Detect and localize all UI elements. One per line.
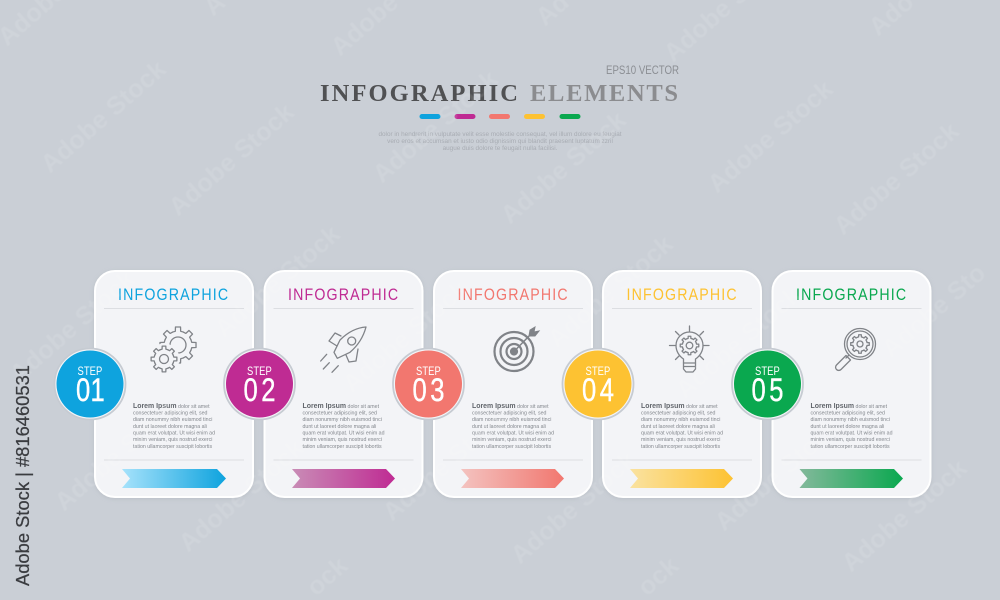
arrow: step 2 xyxy=(292,469,395,488)
step badge 3: STEP xyxy=(416,365,441,378)
panel: step 3 xyxy=(434,271,592,497)
text block: step 2: diam nonummy nibh euismod tinci xyxy=(302,417,382,423)
icon: gears xyxy=(148,327,196,374)
text block: step 3: tation ullamcorper suscipit lobortis xyxy=(472,444,551,450)
title xyxy=(320,80,678,107)
text block: step 1: quam erat volutpat. Ut wisi enim ad xyxy=(133,430,215,436)
text block: step 2: quam erat volutpat. Ut wisi enim ad xyxy=(302,430,385,436)
text block: step 3: diam nonummy nibh euismod tinci xyxy=(472,417,551,423)
subtitle text: augue duis dolore te feugait nulla facilisi. xyxy=(443,145,558,152)
step badge 2 xyxy=(224,348,295,420)
icon: target xyxy=(494,327,539,371)
text block: step 3: consectetuer adipiscing elit, sed xyxy=(472,410,546,416)
title: ELEMENTS xyxy=(530,80,678,107)
background watermarks: Adobe Stock xyxy=(710,413,846,537)
text block: step 3 xyxy=(472,403,554,450)
step badge 4: 04 xyxy=(582,373,614,409)
text block: step 2: dunt ut laoreet dolore magna ali xyxy=(302,424,376,430)
background watermarks: Adobe Stock xyxy=(506,446,642,570)
background watermarks: Adobe Stock xyxy=(543,230,679,354)
step badge 1: 01 xyxy=(76,373,105,409)
heading: step 3: INFOGRAPHIC xyxy=(458,286,568,304)
step badge 1: STEP xyxy=(78,365,102,378)
arrow: step 4 xyxy=(630,469,733,488)
background watermarks: Adobe Stock xyxy=(50,393,186,517)
step badge 3 xyxy=(393,348,464,420)
color dashes xyxy=(420,114,580,119)
text block: step 1 xyxy=(133,403,215,450)
text block: step 5: minim veniam, quis nostrud exerci xyxy=(810,437,890,443)
text block: step 4: Lorem Ipsum dolor sit amet xyxy=(641,403,718,410)
text block: step 5: tation ullamcorper suscipit lobortis xyxy=(810,444,890,450)
background watermarks: Adobe Stock xyxy=(210,220,346,344)
text block: step 4 xyxy=(641,403,723,450)
background watermarks: Adobe Stock xyxy=(368,65,504,189)
text block: step 4: dunt ut laoreet dolore magna ali xyxy=(641,424,715,430)
step badge 2: STEP xyxy=(247,365,272,378)
text block: step 4: tation ullamcorper suscipit lobortis xyxy=(641,444,720,450)
background watermarks: Adobe Stock xyxy=(378,403,514,527)
text block: step 4: consectetuer adipiscing elit, sed xyxy=(641,410,715,416)
background watermarks: Adobe Stock xyxy=(36,55,172,179)
panel: step 5 xyxy=(772,271,930,497)
text block: step 1: Lorem Ipsum dolor sit amet xyxy=(133,403,210,410)
background watermarks: Adobe Stock xyxy=(671,281,807,405)
text block: step 3: minim veniam, quis nostrud exerci xyxy=(472,437,551,443)
text block: step 4: minim veniam, quis nostrud exerci xyxy=(641,437,720,443)
background watermarks: Adobe Sto xyxy=(877,259,991,364)
text block: step 1: tation ullamcorper suscipit lobortis xyxy=(133,444,212,450)
arrow: step 5 xyxy=(800,469,903,488)
heading: step 5: INFOGRAPHIC xyxy=(796,286,906,304)
background watermarks: Adobe Stock xyxy=(338,275,474,399)
panel: step 2 xyxy=(264,271,422,497)
step badge 2: 02 xyxy=(244,373,276,409)
step badge 3: 03 xyxy=(412,373,445,409)
icon: lightbulb with gear xyxy=(670,326,709,372)
text block: step 5: diam nonummy nibh euismod tinci xyxy=(810,417,890,423)
step badge 5: 05 xyxy=(752,373,784,409)
background watermarks: Adobe Stock xyxy=(174,434,310,558)
step badge 4: STEP xyxy=(586,365,610,378)
text block: step 2: minim veniam, quis nostrud exerci xyxy=(302,437,382,443)
step badge 4 xyxy=(562,348,634,420)
subtitle text xyxy=(378,131,622,152)
text block: step 5: quam erat volutpat. Ut wisi enim ad xyxy=(810,430,893,436)
step badge 1 xyxy=(54,348,126,420)
background watermarks: Adobe Stock xyxy=(703,75,839,199)
text block: step 1: consectetuer adipiscing elit, sed xyxy=(133,410,207,416)
arrow: step 1 xyxy=(122,469,226,488)
text block: step 2 xyxy=(302,403,385,450)
text block: step 2: tation ullamcorper suscipit lobortis xyxy=(302,444,382,450)
heading: step 4: INFOGRAPHIC xyxy=(626,286,737,304)
text block: step 2: Lorem Ipsum dolor sit amet xyxy=(302,403,380,410)
text block: step 5: consectetuer adipiscing elit, sed xyxy=(810,410,885,416)
text block: step 3: dunt ut laoreet dolore magna ali xyxy=(472,424,546,430)
panel: step 1 xyxy=(95,271,253,497)
text block: step 5 xyxy=(810,403,893,450)
icon: magnifier with gear xyxy=(836,328,876,370)
text block: step 4: quam erat volutpat. Ut wisi enim ad xyxy=(641,430,723,436)
background watermarks: Adobe Stock xyxy=(496,106,632,230)
text block: step 1: diam nonummy nibh euismod tinci xyxy=(133,417,212,423)
subtitle text: dolor in hendrerit in vulputate velit esse molestie consequat, vel illum dolore eu feugiat xyxy=(378,131,622,138)
step badge 5 xyxy=(732,348,803,420)
icon: rocket xyxy=(321,327,366,372)
text block: step 4: diam nonummy nibh euismod tinci xyxy=(641,417,720,423)
arrow: step 3 xyxy=(461,469,564,488)
text block: step 3: quam erat volutpat. Ut wisi enim ad xyxy=(472,430,554,436)
text block: step 5: dunt ut laoreet dolore magna ali xyxy=(810,424,884,430)
heading: step 1: INFOGRAPHIC xyxy=(118,286,228,304)
text block: step 3: Lorem Ipsum dolor sit amet xyxy=(472,403,549,410)
vertical stock id text: Adobe Stock | #816460531 xyxy=(13,365,33,586)
background watermarks: Adobe Stock xyxy=(829,117,965,241)
title: INFOGRAPHIC xyxy=(320,80,518,107)
step badge 5: STEP xyxy=(755,365,780,378)
background watermarks: Adobe Stock xyxy=(837,454,973,578)
eps label: EPS10 VECTOR xyxy=(606,65,679,77)
panel: step 4 xyxy=(603,271,761,497)
text block: step 5: Lorem Ipsum dolor sit amet xyxy=(810,403,888,410)
text block: step 2: consectetuer adipiscing elit, sed xyxy=(302,410,377,416)
subtitle text: vero eros et accumsan et iusto odio dignissim qui blandit praesent luptatum zzril xyxy=(387,138,613,145)
text block: step 1: dunt ut laoreet dolore magna ali xyxy=(133,424,207,430)
text block: step 1: minim veniam, quis nostrud exerci xyxy=(133,437,212,443)
heading: step 2: INFOGRAPHIC xyxy=(288,286,398,304)
background watermarks: Adobe Stock xyxy=(5,265,141,389)
background watermarks: Adobe Stock xyxy=(164,98,300,222)
